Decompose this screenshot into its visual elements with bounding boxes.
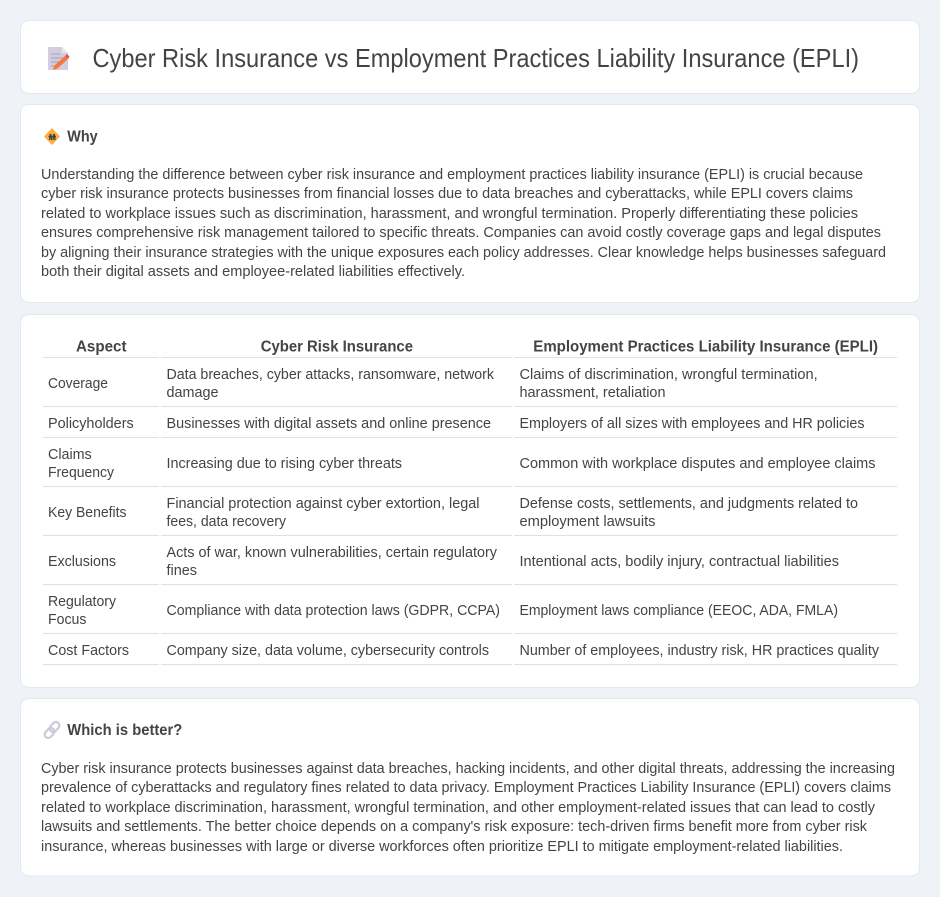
row: key benefits <box>43 496 897 536</box>
row: cost factors: Company size, data volume, cybersecurity controls <box>166 643 489 659</box>
row: key benefits: Defense costs, settlements, and judgments related to <box>520 496 858 512</box>
row: policyholders: Businesses with digital assets and online presence <box>166 416 491 432</box>
table header: Aspect <box>76 339 127 356</box>
row: regulatory focus <box>43 594 897 634</box>
panel: comparison table <box>20 314 920 688</box>
row: claims frequency: Increasing due to rising cyber threats <box>166 456 402 472</box>
row: coverage: Claims of discrimination, wrongful termination, <box>520 367 818 383</box>
row: regulatory focus: Focus <box>48 612 86 628</box>
panel: why <box>20 104 920 302</box>
text block: which paragraph: insurance, whereas businesses with large or diverse workforces often prioritize EPLI to mitigate employment-related liabilities. <box>41 839 843 855</box>
row: regulatory focus: Employment laws compliance (EEOC, ADA, FMLA) <box>520 603 838 619</box>
row: coverage <box>43 367 897 407</box>
panel: which is better <box>20 698 920 876</box>
text block: why paragraph: both their digital assets and employee-related liabilities effectively. <box>41 264 465 280</box>
row: claims frequency: Frequency <box>48 465 115 481</box>
row: coverage: damage <box>166 385 218 401</box>
row: regulatory focus: Compliance with data protection laws (GDPR, CCPA) <box>166 603 500 619</box>
row: policyholders: Policyholders <box>48 416 134 432</box>
text block: why paragraph: related to workplace issues such as discrimination, harassment, and wrongful termination. Properly differentiating these policies <box>41 206 858 222</box>
icon: memo with pencil <box>48 47 70 70</box>
row: exclusions <box>43 545 897 585</box>
row: key benefits: Financial protection against cyber extortion, legal <box>166 496 480 512</box>
table header: Employment Practices Liability Insurance (EPLI) <box>533 339 878 356</box>
row: claims frequency <box>43 447 897 487</box>
text block: why paragraph <box>41 167 886 280</box>
row: claims frequency: Claims <box>48 447 92 463</box>
row: coverage: Coverage <box>48 376 108 392</box>
text block: why paragraph: ensures comprehensive risk management tailored to specific threats. Companies can avoid costly coverage gaps and legal disputes <box>41 225 881 241</box>
table header: Cyber Risk Insurance <box>261 339 413 356</box>
title: Cyber Risk Insurance vs Employment Practices Liability Insurance (EPLI) <box>92 45 859 73</box>
row: exclusions: Exclusions <box>48 554 116 570</box>
row: key benefits: employment lawsuits <box>520 514 656 530</box>
row: exclusions: fines <box>166 563 197 579</box>
text block: which paragraph: prevalence of cyberattacks and regulatory fines related to data privacy. Employment Practices Liability Insurance (EPLI) covers claims <box>41 780 891 796</box>
icon: link <box>43 721 61 739</box>
row: cost factors: Number of employees, industry risk, HR practices quality <box>520 643 880 659</box>
text block: which paragraph: related to workplace discrimination, harassment, wrongful termination, and other employment-related issues that can lead to costly <box>41 800 876 816</box>
heading: which is better: Which is better? <box>67 722 182 739</box>
row: exclusions: Acts of war, known vulnerabilities, certain regulatory <box>166 545 498 561</box>
row: coverage: harassment, retaliation <box>520 385 666 401</box>
text block: which paragraph <box>41 761 895 855</box>
row: key benefits: fees, data recovery <box>166 514 287 530</box>
icon: orange diamond sign <box>44 128 60 145</box>
heading: why: Why <box>67 129 98 146</box>
text block: why paragraph: Understanding the difference between cyber risk insurance and employment practices liability insurance (EPLI) is crucial because <box>41 167 863 183</box>
text block: which paragraph: Cyber risk insurance protects businesses against data breaches, hacking incidents, and other digital threats, addressing the increasing <box>41 761 895 777</box>
text block: which paragraph: lawsuits and settlements. The better choice depends on a company's risk exposure: tech-driven firms benefit more from cyber risk <box>41 819 868 835</box>
row: cost factors <box>43 643 897 665</box>
row: policyholders <box>43 416 897 438</box>
table header <box>43 339 897 358</box>
row: cost factors: Cost Factors <box>48 643 129 659</box>
panel: title card <box>20 20 920 94</box>
row: coverage: Data breaches, cyber attacks, ransomware, network <box>166 367 495 383</box>
row: claims frequency: Common with workplace disputes and employee claims <box>520 456 876 472</box>
row: policyholders: Employers of all sizes with employees and HR policies <box>520 416 864 432</box>
row: regulatory focus: Regulatory <box>48 594 117 610</box>
row: key benefits: Key Benefits <box>48 505 126 521</box>
text block: why paragraph: by aligning their insurance strategies with the unique exposures each policy addresses. Clear knowledge helps businesses safeguard <box>41 245 886 261</box>
row: exclusions: Intentional acts, bodily injury, contractual liabilities <box>520 554 839 570</box>
text block: why paragraph: cyber risk insurance protects businesses from financial losses due to data breaches and cyberattacks, while EPLI covers claims <box>41 186 853 202</box>
